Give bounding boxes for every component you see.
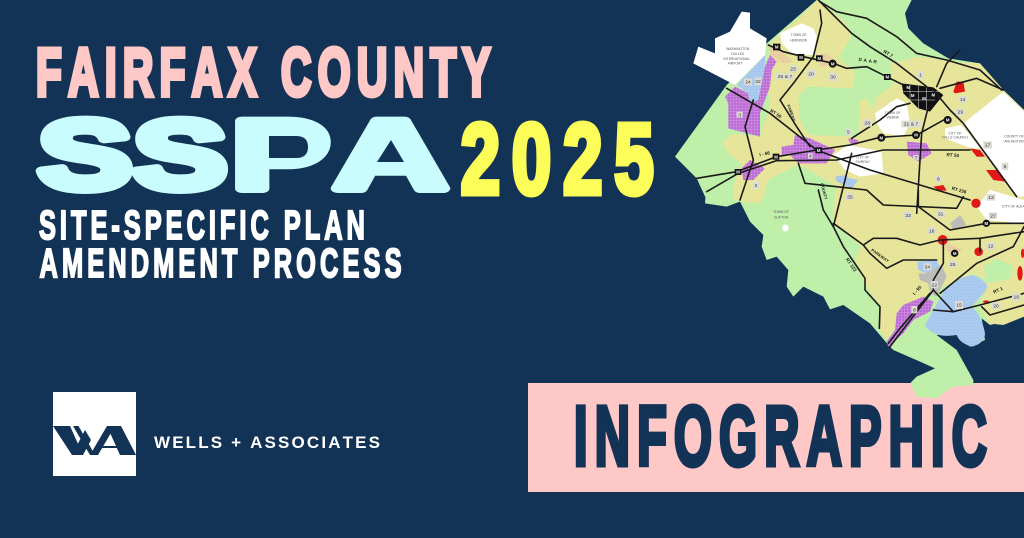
metro station markers: M bbox=[775, 45, 779, 50]
numbered area labels: 31 bbox=[938, 211, 944, 217]
airport white area bbox=[693, 12, 767, 85]
numbered area labels: 28 bbox=[865, 121, 870, 127]
metro station markers: M bbox=[922, 96, 926, 101]
heading: SSPA: S bbox=[38, 100, 132, 209]
metro station markers bbox=[735, 44, 990, 257]
numbered area labels: 5 bbox=[847, 130, 850, 136]
numbered area labels: 32 bbox=[755, 79, 761, 85]
road names: DAAR bbox=[858, 57, 879, 65]
road names: PARKWAY bbox=[870, 247, 890, 264]
metro station markers: M bbox=[799, 55, 803, 60]
numbered area labels: 18 bbox=[929, 228, 935, 234]
infographic banner background bbox=[528, 383, 1024, 492]
numbered area labels: 27 bbox=[990, 213, 996, 219]
metro station markers: M bbox=[932, 93, 936, 98]
subtitle: AMENDMENT PROCESS bbox=[40, 241, 406, 287]
roads bbox=[697, 0, 1024, 347]
numbered area labels: 34 bbox=[925, 264, 930, 270]
metro station markers: M bbox=[831, 61, 835, 66]
numbered area labels: 1 bbox=[919, 73, 922, 79]
metro station markers: M bbox=[817, 148, 821, 153]
numbered area labels: 9 bbox=[1004, 164, 1007, 170]
towns and cities white areas bbox=[780, 23, 1024, 231]
green park patch bbox=[983, 258, 1013, 283]
road names: FAIRFAX bbox=[786, 104, 797, 122]
banner label: Infographic: INFOGRAPHIC bbox=[574, 389, 994, 483]
place names: TOWN OF bbox=[791, 33, 807, 37]
subtitle: SITE-SPECIFIC PLAN bbox=[39, 203, 369, 249]
numbered area labels: 6 bbox=[937, 177, 940, 183]
metro station markers: M bbox=[946, 118, 950, 123]
numbered area labels: 21 & 7 bbox=[904, 122, 918, 128]
logo wordmark: WELLS + ASSOCIATES bbox=[154, 433, 380, 452]
road names: RT 1 bbox=[992, 286, 1004, 295]
metro station markers: M bbox=[914, 133, 918, 138]
metro station markers: M bbox=[818, 56, 822, 61]
metro station markers: M bbox=[736, 170, 740, 175]
metro station markers: M bbox=[953, 251, 957, 256]
numbered area labels bbox=[737, 66, 1021, 313]
numbered area labels: 17 bbox=[985, 143, 991, 149]
place names: FALLS CHURCH bbox=[942, 135, 968, 139]
subtitle bbox=[39, 203, 406, 287]
place names: TOWN OF bbox=[885, 111, 901, 115]
metro station markers: M bbox=[886, 75, 890, 80]
road names: RT 123 bbox=[845, 257, 858, 273]
road names: RT 50 bbox=[946, 152, 960, 158]
numbered area labels: 25 & 7 bbox=[778, 74, 792, 80]
place names: ARLINGTON bbox=[1004, 140, 1024, 144]
heading: SSPA: P bbox=[232, 101, 329, 210]
numbered area labels: 35 bbox=[847, 194, 853, 200]
heading: SSPA bbox=[38, 100, 447, 210]
place names: INTERNATIONAL bbox=[723, 57, 750, 61]
numbered area labels: 23 bbox=[790, 67, 796, 73]
numbered area labels: 29 bbox=[958, 110, 963, 116]
road names: I - 66 bbox=[759, 150, 771, 157]
numbered area labels: 20 bbox=[808, 71, 814, 77]
numbered area labels: 2 bbox=[755, 183, 758, 189]
numbered area labels: 22 bbox=[932, 282, 937, 288]
metro station markers: M bbox=[985, 221, 989, 226]
metro station markers: M bbox=[774, 154, 778, 159]
numbered area labels: 15 bbox=[956, 303, 962, 309]
road names: I - 95 bbox=[912, 284, 923, 296]
numbered area labels: 13 bbox=[988, 195, 994, 201]
map of Fairfax County bbox=[675, 0, 1024, 398]
numbered area labels: 33 bbox=[905, 213, 911, 219]
metro station markers: M bbox=[911, 93, 915, 98]
numbered area labels: 12 bbox=[988, 244, 994, 250]
Tysons black zone bbox=[902, 83, 943, 112]
blue zones bbox=[737, 55, 987, 347]
county base lower bbox=[705, 190, 1024, 398]
numbered area labels: 3 bbox=[738, 112, 741, 118]
numbered area labels: 8 bbox=[913, 307, 916, 313]
place names bbox=[723, 33, 1024, 219]
numbered area labels: 14 bbox=[960, 97, 966, 103]
place names: HERNDON bbox=[790, 38, 808, 42]
place names: VIENNA bbox=[886, 116, 900, 120]
road names bbox=[759, 49, 1004, 296]
numbered area labels: 20 bbox=[993, 303, 999, 309]
numbered area labels: 7 bbox=[915, 155, 918, 161]
purple zones bbox=[725, 55, 933, 347]
suburban yellow zones lower bbox=[733, 190, 1024, 340]
place names: WASHINGTON bbox=[726, 47, 750, 51]
road names: COUNTY bbox=[820, 183, 829, 200]
metro station markers: M bbox=[907, 85, 911, 90]
place names: TOWN OF bbox=[773, 210, 789, 214]
place names: CITY OF bbox=[948, 131, 962, 135]
heading: Fairfax County: FAIRFAX COUNTY bbox=[36, 34, 497, 110]
county base upper bbox=[675, 0, 1024, 200]
place names: DULLES bbox=[731, 52, 745, 56]
metro station markers: M bbox=[880, 135, 884, 140]
numbered area labels: 30 bbox=[830, 75, 836, 81]
place names: CITY OF bbox=[856, 155, 869, 159]
grey and peach zones bbox=[768, 45, 967, 297]
place names: CLIFTON bbox=[774, 215, 789, 219]
heading: SSPA: A bbox=[334, 100, 447, 209]
heading: 2025: 2025 bbox=[461, 104, 665, 215]
logo: WA mark bbox=[53, 392, 136, 476]
heading: SSPA: S bbox=[133, 100, 227, 209]
red zones bbox=[933, 82, 1024, 303]
road names: RT 50 bbox=[769, 108, 783, 119]
place names: AIRPORT bbox=[728, 61, 742, 65]
numbered area labels: 24 bbox=[745, 80, 751, 86]
place names: COUNTY OF bbox=[1004, 134, 1024, 138]
numbered area labels: 25 bbox=[950, 262, 956, 268]
road names: RT 236 bbox=[951, 186, 967, 195]
road names: RT 7 bbox=[882, 49, 894, 59]
place names: CITY OF ALEX bbox=[1002, 204, 1024, 208]
numbered area labels: 16 bbox=[1014, 295, 1019, 301]
suburban yellow zones upper bbox=[722, 0, 1024, 200]
numbered area labels: 4 bbox=[809, 154, 812, 160]
place names: FAIRFAX bbox=[856, 160, 870, 164]
